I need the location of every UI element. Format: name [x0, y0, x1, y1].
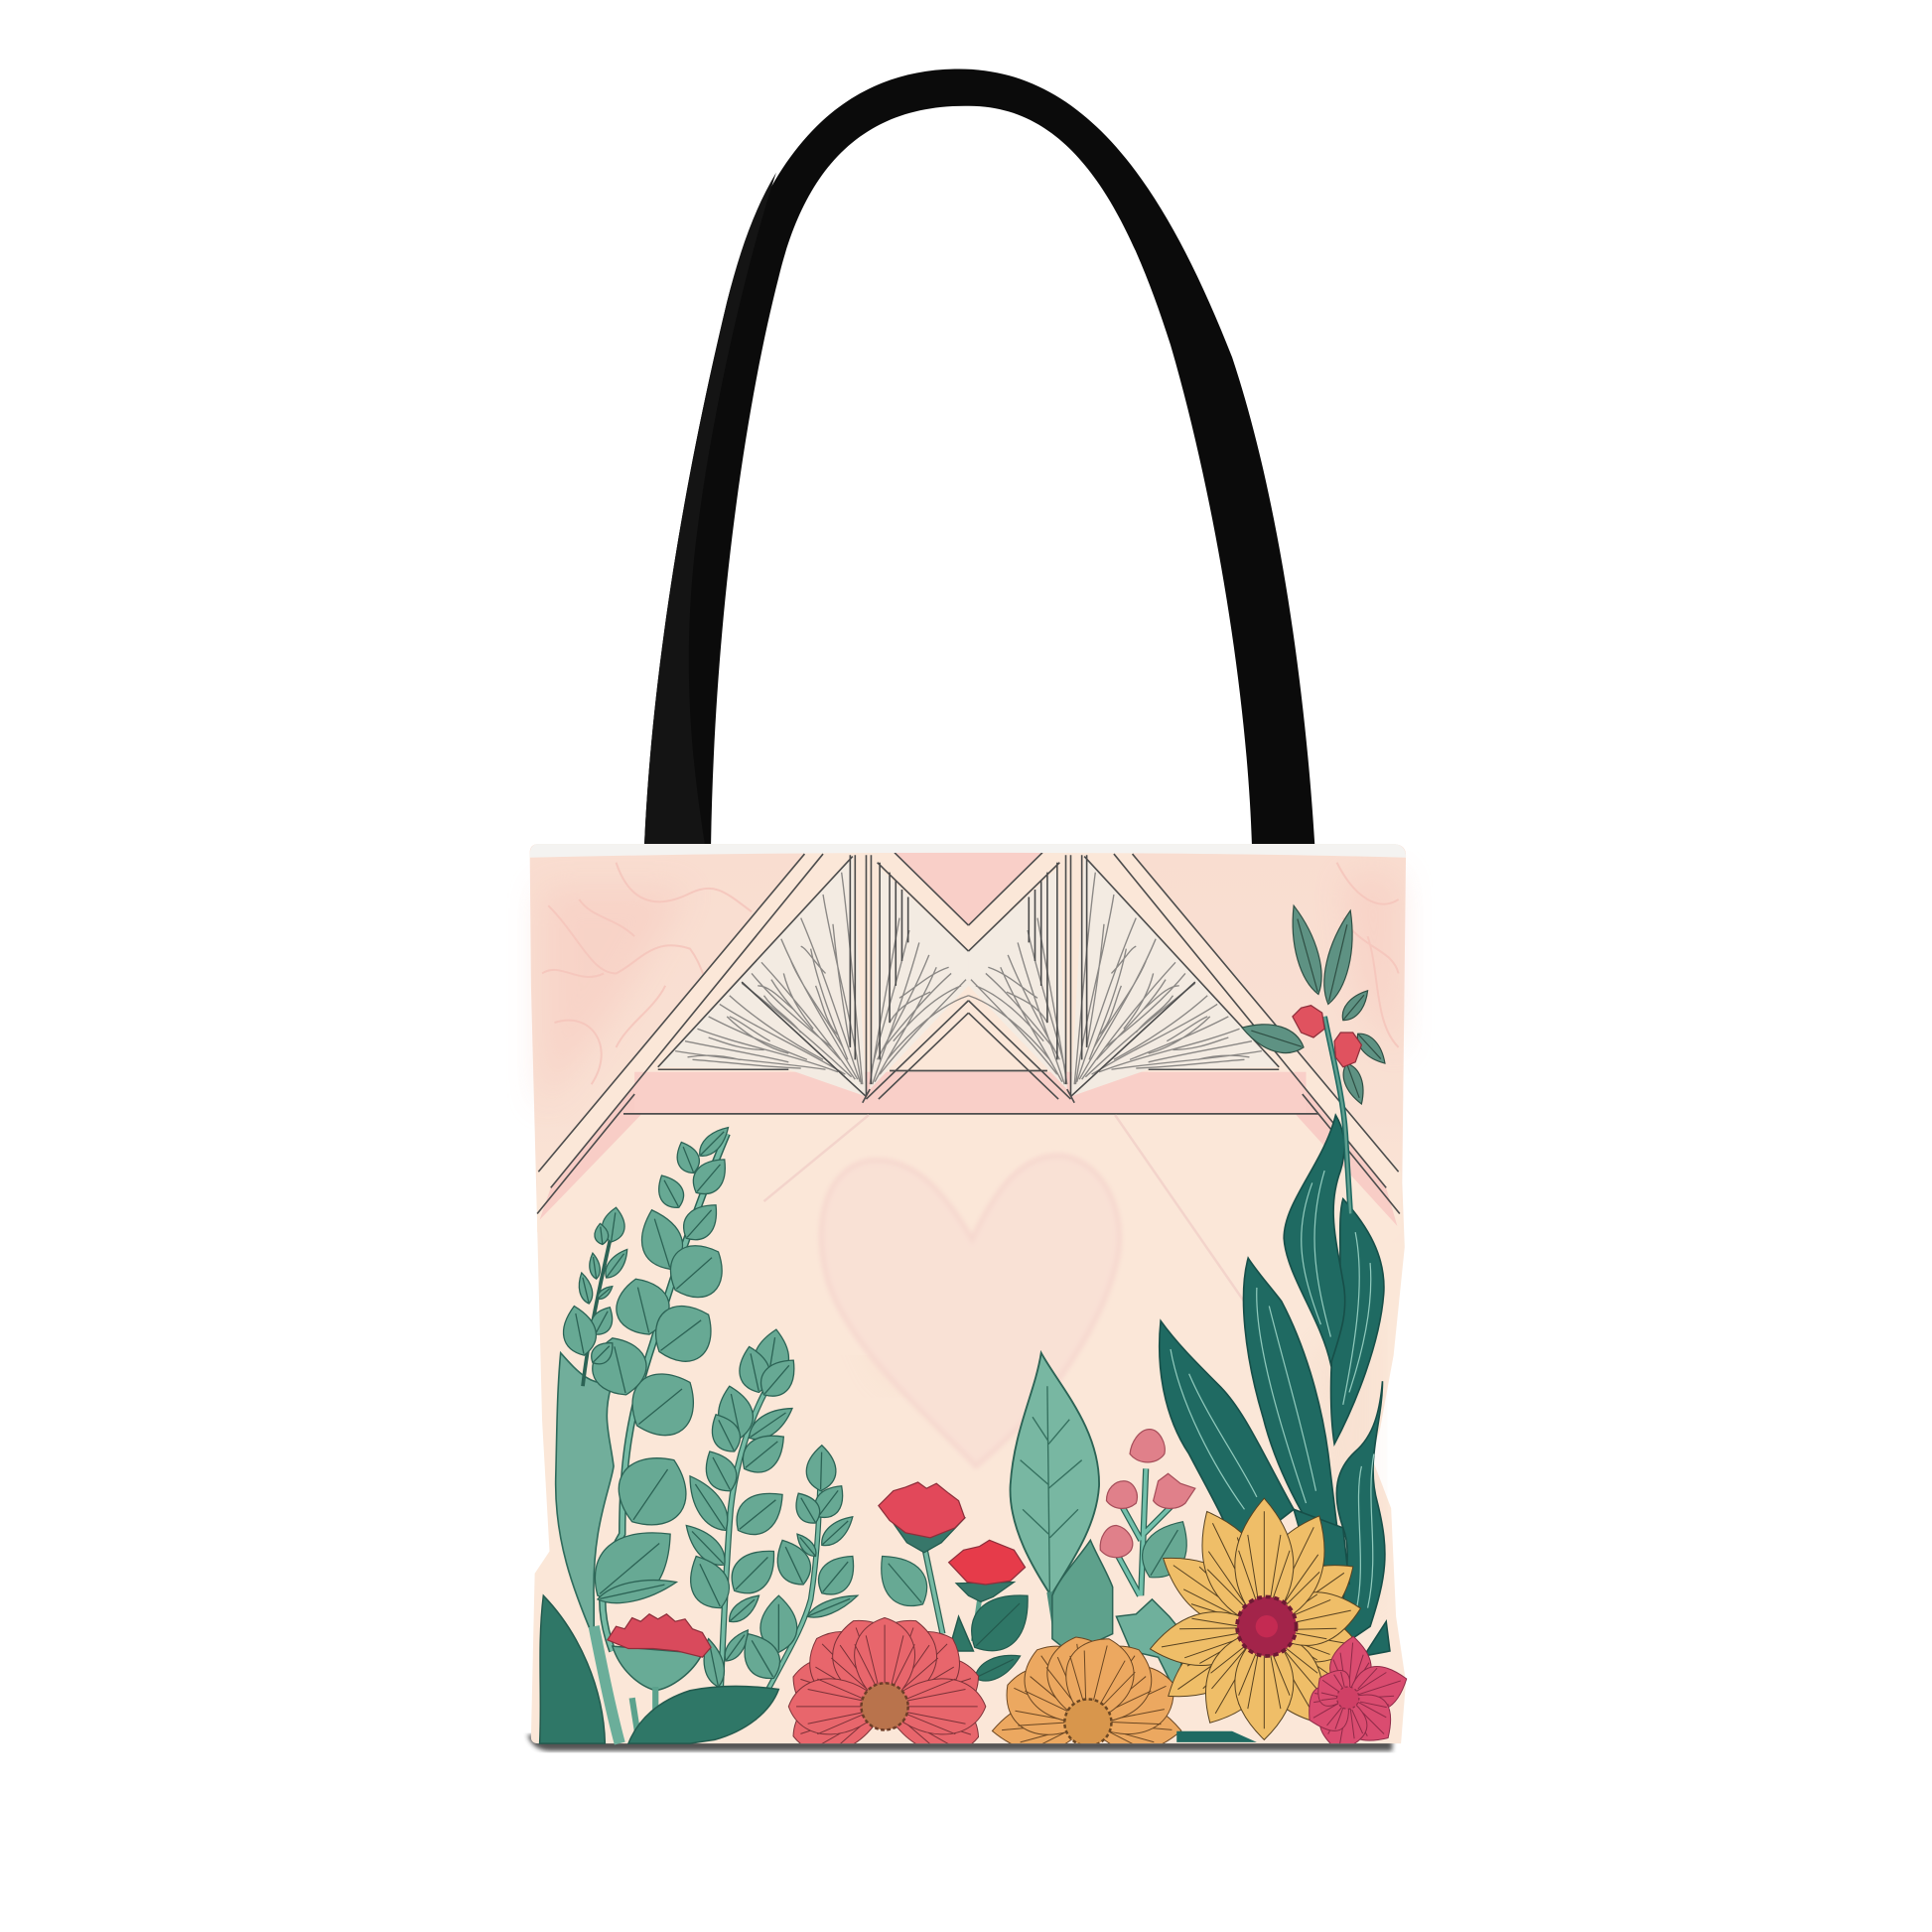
- orange flower: [991, 1636, 1181, 1743]
- pink top triangle: [895, 853, 1042, 925]
- dark teal leaves on right: [1160, 1115, 1390, 1656]
- magenta flower: [1309, 1636, 1408, 1743]
- light green leaf by buds: [1116, 1599, 1185, 1694]
- geometric fans and lines: right half: [968, 853, 1400, 1213]
- dark leaf bottom left: [540, 1595, 605, 1743]
- handle: black strap: [644, 69, 1314, 844]
- plant: small sprig: [734, 1445, 865, 1691]
- red flower: left: [608, 1614, 711, 1737]
- faint watermark lines: [763, 1115, 1282, 1355]
- bag body: [530, 844, 1406, 1743]
- coral flower: [788, 1617, 987, 1743]
- plant: large left leaf: [556, 1353, 614, 1639]
- watercolour heart: [821, 1156, 1120, 1466]
- plant: tall eucalyptus sprig: [578, 1122, 736, 1651]
- dark leaf under yellow flower: [1176, 1731, 1257, 1742]
- yellow flower: [1146, 1498, 1368, 1739]
- red flower with stem: upper: [867, 1482, 965, 1634]
- pink side strips: [540, 1084, 1397, 1226]
- dark leaf bottom centre: [628, 1686, 778, 1743]
- dark leaves near red flowers: [949, 1579, 1044, 1687]
- mid green leaf: [1052, 1540, 1113, 1654]
- geometric fans and lines: left half: [537, 853, 968, 1213]
- plant: centre left sprig: [679, 1326, 804, 1689]
- stem under large leaf: [594, 1626, 620, 1743]
- pink horizontal band: [634, 1072, 1307, 1114]
- geometric design: cream triangle field: [537, 853, 1401, 1355]
- band outlines: [623, 1070, 1318, 1114]
- large light green leaf: [1011, 1353, 1099, 1639]
- cream centre peak: [890, 1013, 1047, 1069]
- floret at top right: [1238, 902, 1391, 1213]
- bag shadow: [527, 1734, 1392, 1751]
- red flower with stem: lower: [949, 1540, 1026, 1641]
- pink buds with stems: [1100, 1430, 1200, 1595]
- top white hem: [530, 844, 1406, 858]
- plant: thin left sprig: [558, 1206, 632, 1386]
- marble texture and cloth folds: [542, 863, 1399, 1601]
